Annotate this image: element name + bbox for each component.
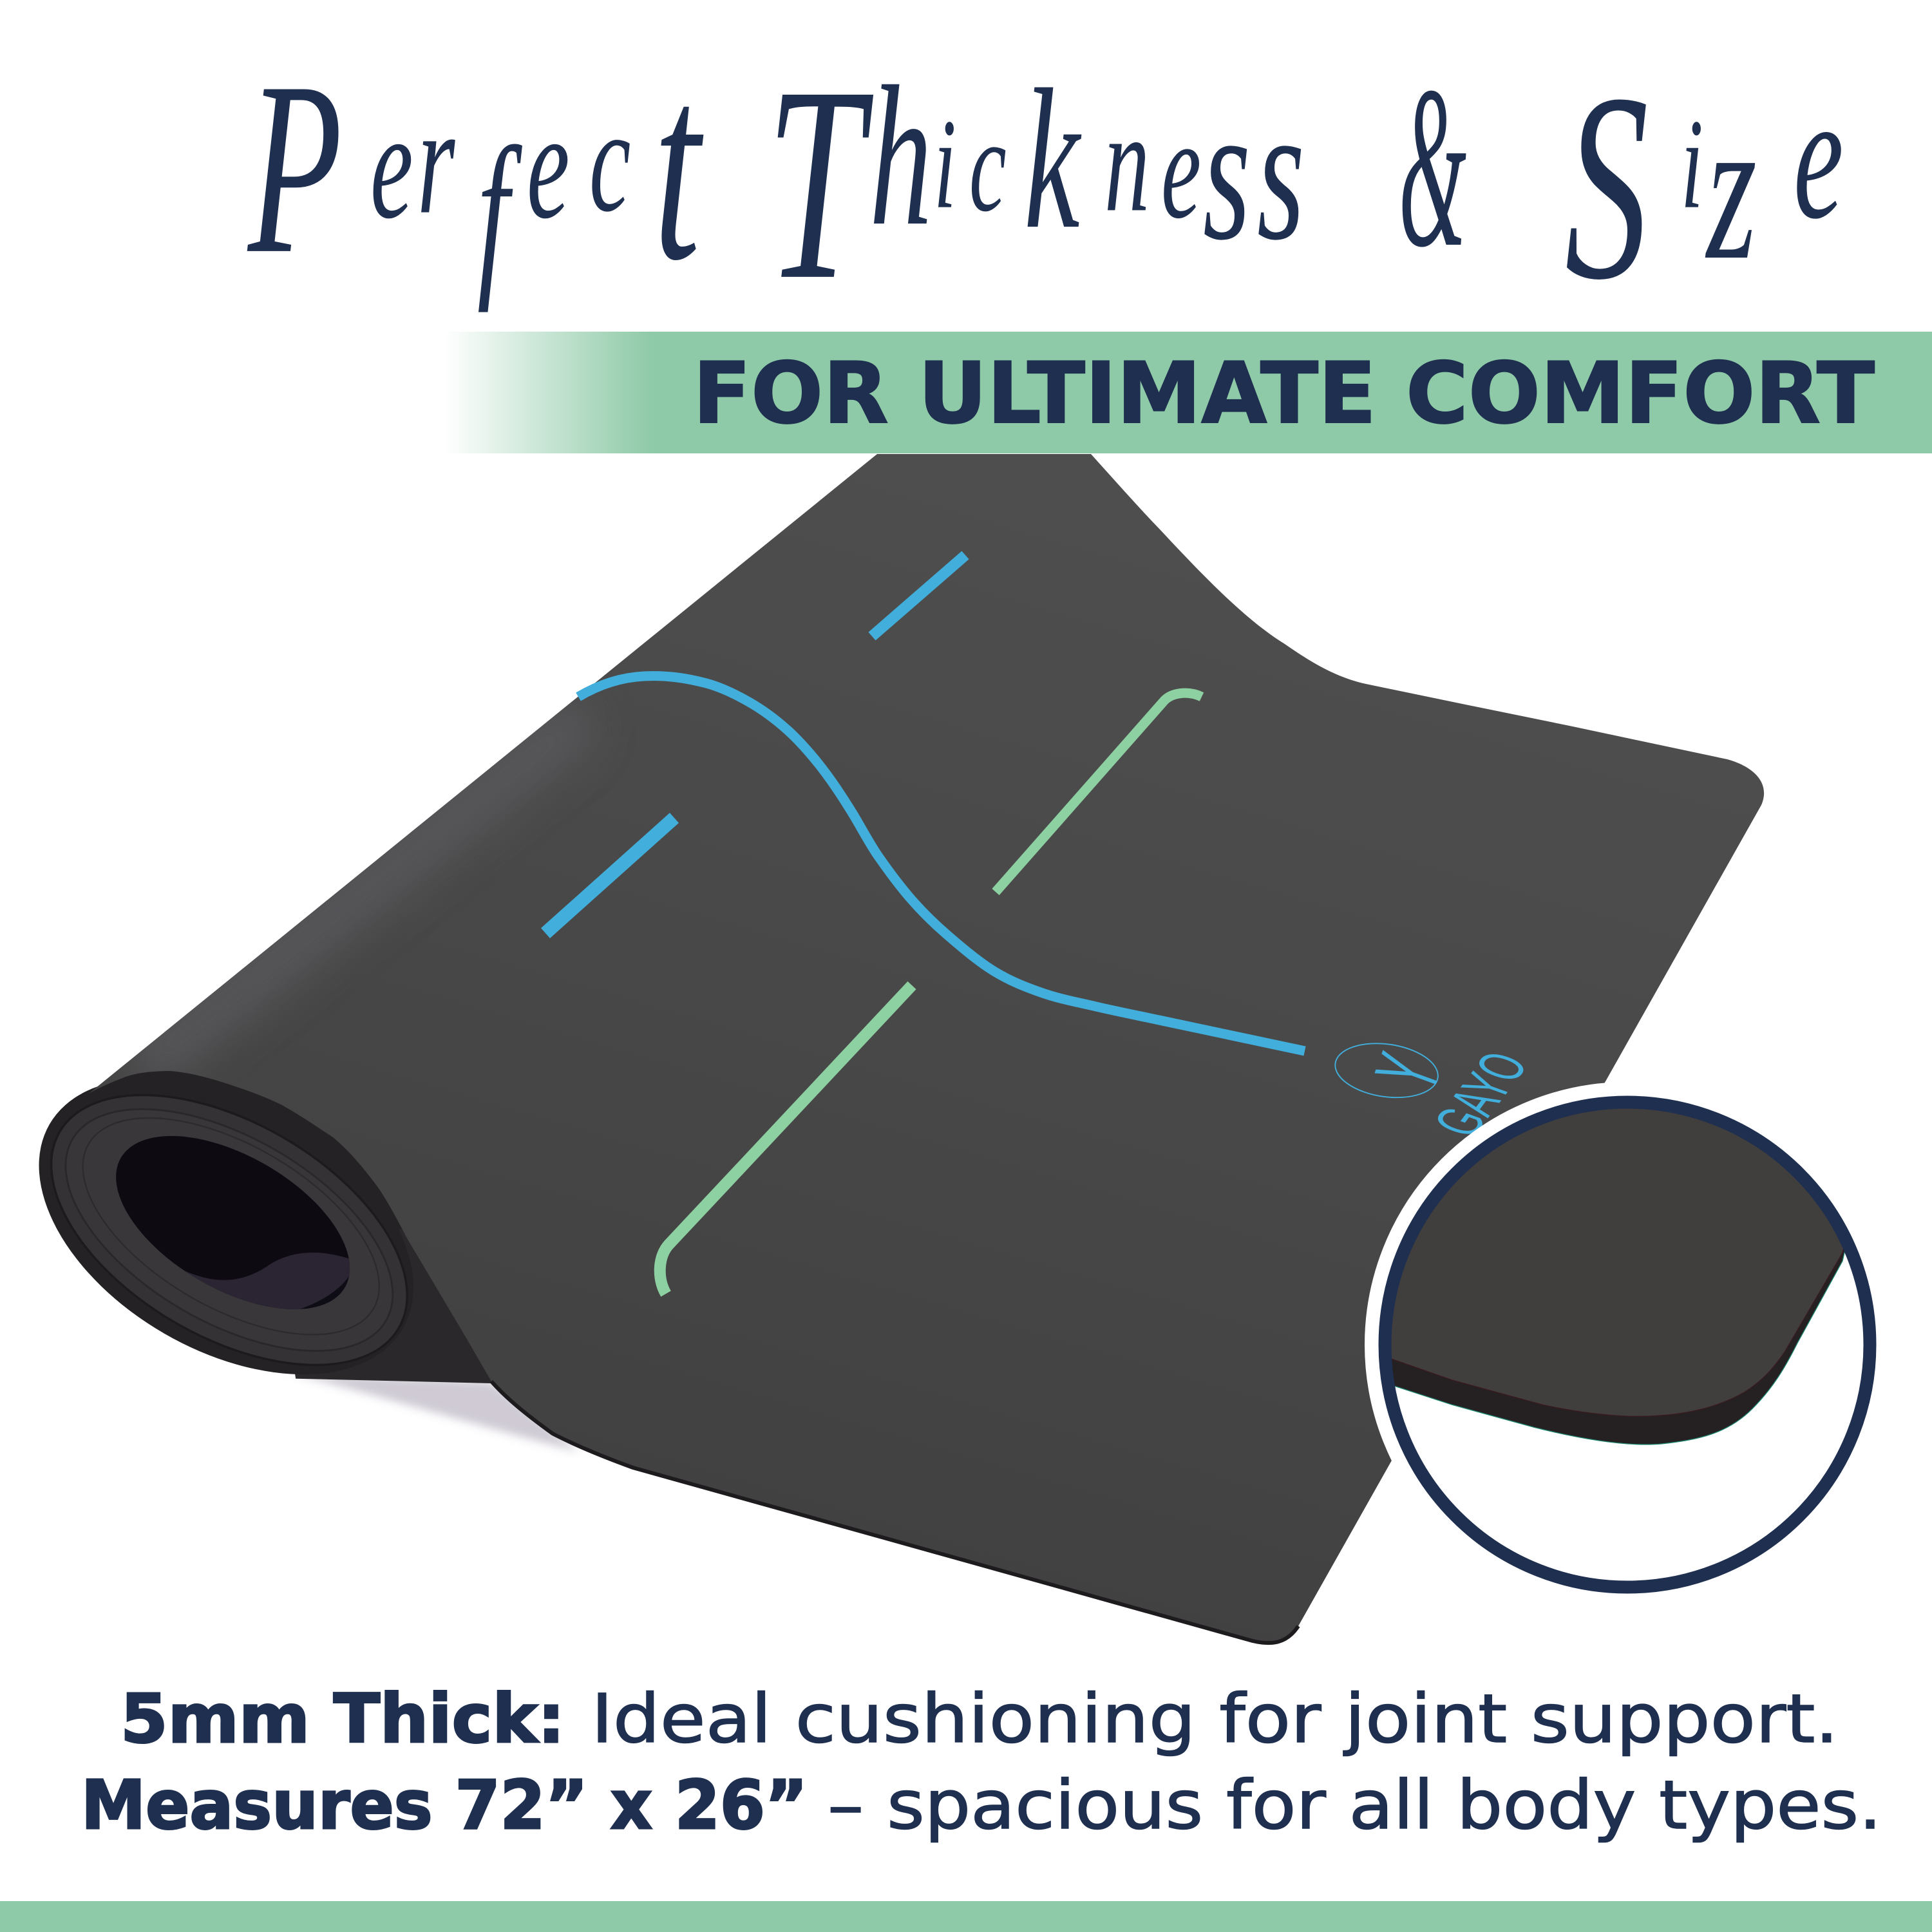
- title: S: [1565, 39, 1649, 336]
- lens mat close-up: [1391, 1109, 1844, 1445]
- subtitle band: [444, 332, 1932, 453]
- subtitle text: FOR ULTIMATE COMFORT: [693, 344, 1875, 442]
- title: f: [477, 110, 522, 313]
- roll shadow wedge: [259, 1141, 497, 1383]
- roll silhouette: [0, 1017, 465, 1435]
- logo letter: Y: [1356, 1043, 1459, 1101]
- description line 1: [120, 1680, 1839, 1758]
- description line 2: – spacious for all body types.: [828, 1766, 1882, 1844]
- title: s: [1257, 64, 1305, 281]
- title: s: [1203, 64, 1251, 281]
- title: k: [1024, 48, 1083, 270]
- title: [245, 20, 1844, 337]
- title: e: [1161, 90, 1201, 249]
- green line: upper: [996, 693, 1202, 892]
- title: c: [589, 77, 630, 243]
- roll inner wall: [185, 1253, 350, 1309]
- roll wrap one: [6, 1039, 453, 1421]
- title: e: [1794, 57, 1844, 256]
- roll shadow: [289, 1372, 580, 1452]
- description line 2: [81, 1766, 1882, 1844]
- title: i: [934, 93, 956, 236]
- blue line: short top: [872, 555, 965, 636]
- blue line: long curve: [578, 676, 1305, 1051]
- roll wrap two: [26, 1059, 432, 1401]
- logo ring: [1332, 1037, 1441, 1104]
- title: i: [1681, 93, 1703, 236]
- mat logo: [1332, 1037, 1542, 1144]
- green line: lower: [660, 985, 912, 1294]
- yoga mat roll end: [0, 1017, 580, 1452]
- title: h: [869, 45, 933, 268]
- roll hole: [88, 1101, 378, 1345]
- description line 2: Measures 72” x 26”: [81, 1766, 808, 1844]
- zoom lens: [1370, 1081, 1884, 1600]
- roll top backing: [87, 1069, 410, 1230]
- yoga mat surface: [89, 454, 1764, 1643]
- description line 1: Ideal cushioning for joint support.: [591, 1680, 1839, 1758]
- title: e: [527, 80, 570, 251]
- title: P: [245, 32, 343, 305]
- title: T: [766, 29, 875, 337]
- bottom band: [0, 1901, 1932, 1932]
- title: t: [654, 20, 706, 316]
- description line 1: 5mm Thick:: [120, 1680, 565, 1758]
- roll wrap three: [48, 1074, 414, 1379]
- blue line: short middle: [545, 818, 674, 933]
- title: e: [370, 80, 413, 251]
- title: r: [417, 75, 455, 246]
- lens border: [1385, 1103, 1870, 1587]
- title: c: [969, 91, 1007, 240]
- logo wordmark: GAYO: [1420, 1045, 1542, 1144]
- title: &: [1399, 39, 1466, 295]
- mat bottom edge: [491, 1381, 1298, 1643]
- roll crescent: [300, 1276, 349, 1309]
- title: n: [1104, 83, 1150, 242]
- mat edge highlight: [155, 728, 567, 1056]
- title: z: [1705, 74, 1757, 303]
